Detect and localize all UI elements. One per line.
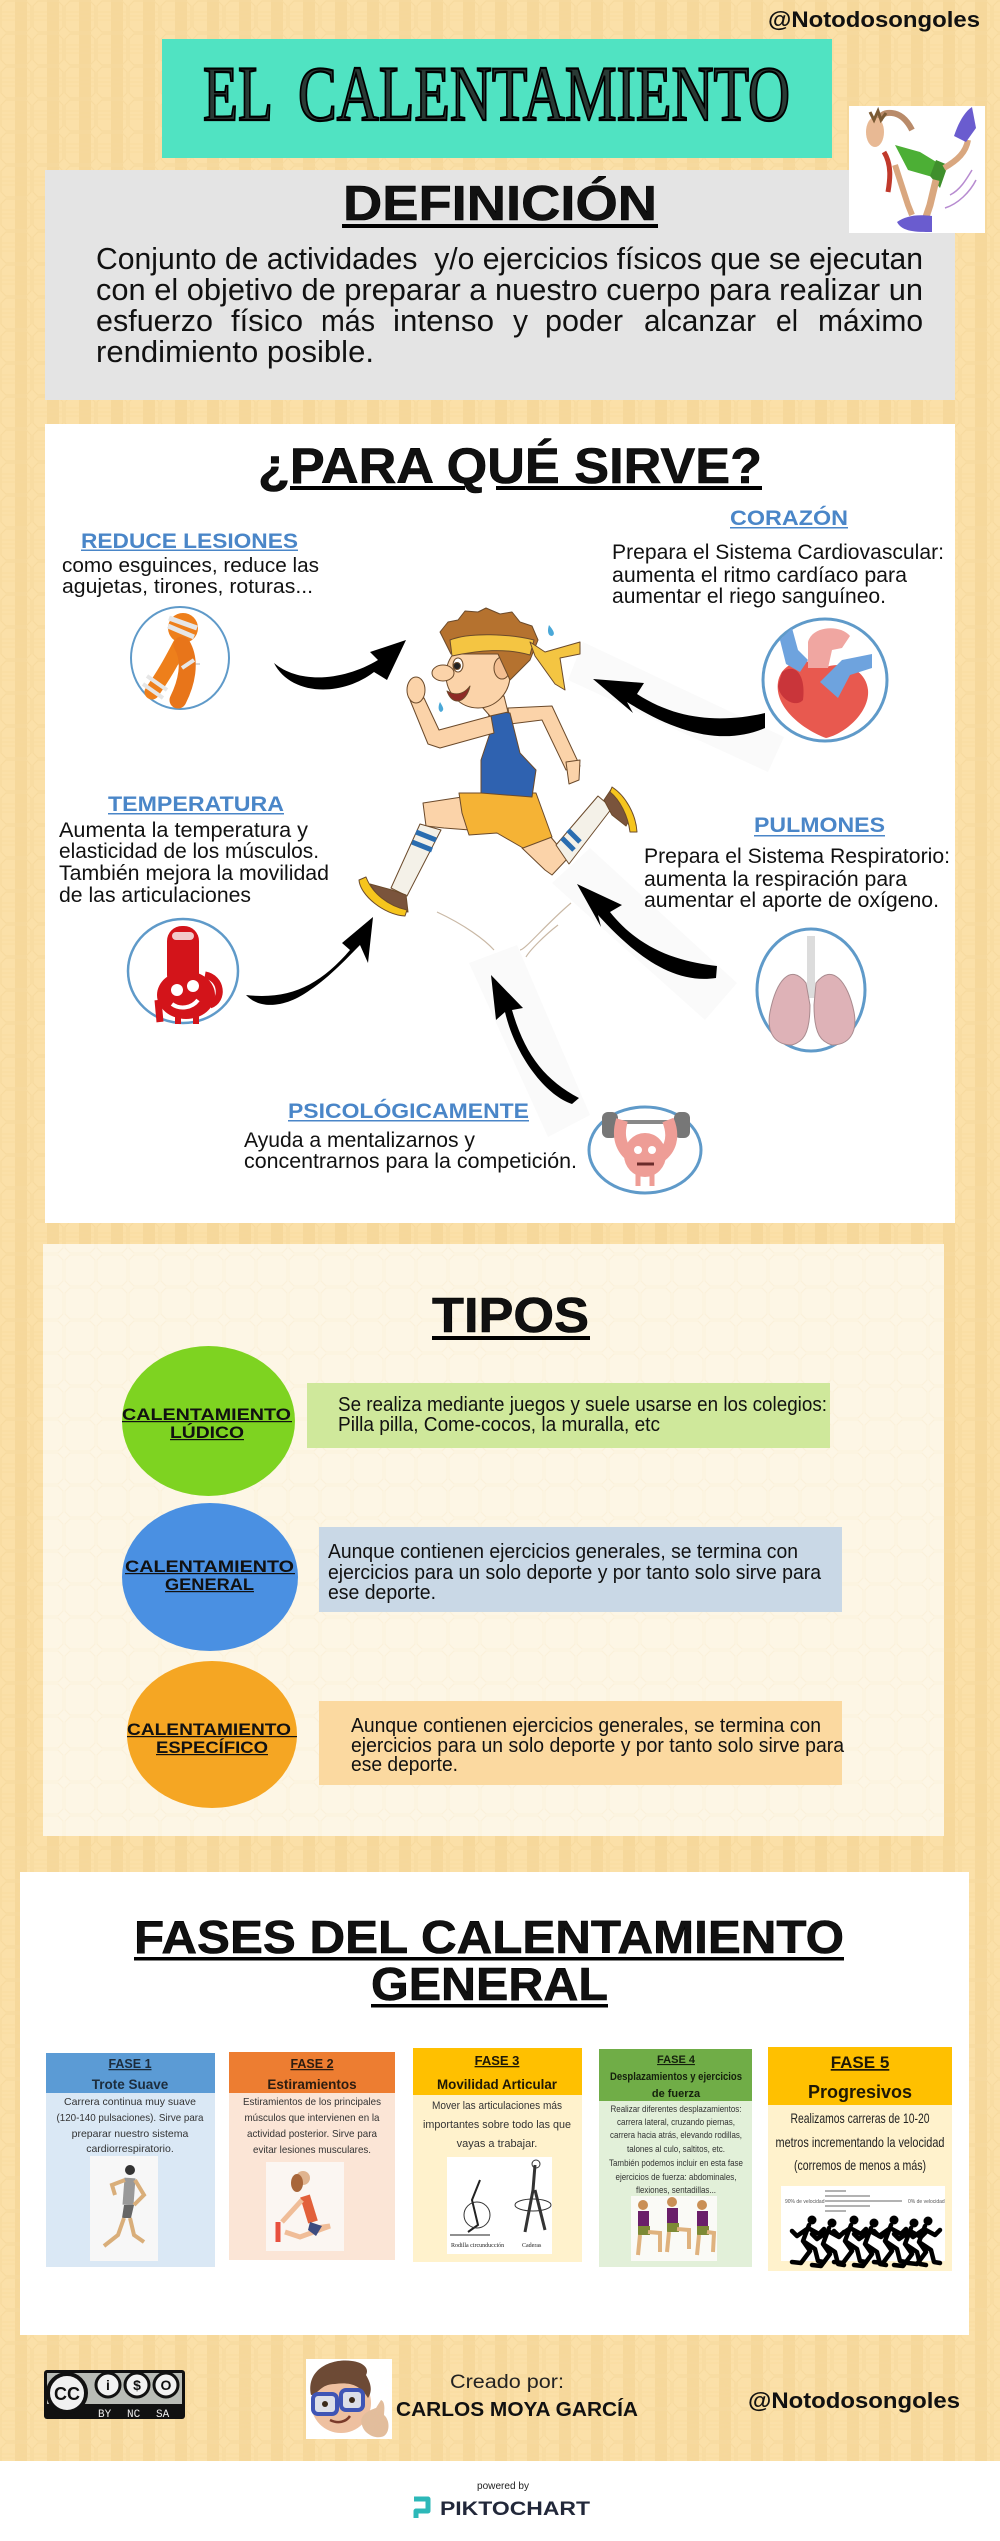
tipo: específico: Aunque contienen ejercicios generales, se termina con (351, 1715, 821, 1737)
block: pulmones: PULMONES (754, 814, 885, 837)
front leg (423, 797, 470, 830)
panel: tipos (43, 1244, 944, 1836)
block: corazón: Prepara el Sistema Cardiovascular: (612, 541, 944, 564)
sweat drops (439, 625, 554, 712)
block: psicológicamente: PSICOLÓGICAMENTE (288, 1099, 529, 1123)
text: definición (96, 241, 923, 369)
fase 1: cardiorrespiratorio. (86, 2143, 174, 2155)
block: temperatura: TEMPERATURA (108, 793, 284, 816)
block: psicológicamente: concentrarnos para la competición. (244, 1150, 577, 1173)
fase 4 (599, 2049, 752, 2267)
text: definición: el (776, 303, 798, 338)
icon: injured orange figure (131, 607, 229, 709)
piktochart branding: PIKTOCHART (440, 2499, 590, 2520)
block: pulmones: Prepara el Sistema Respiratorio: (644, 845, 950, 868)
fase 3: Rodilla circunducción (451, 2243, 504, 2249)
icon: thermometer (128, 919, 238, 1024)
fase 2: actividad posterior. Sirve para (247, 2128, 377, 2140)
text: definición: más (321, 303, 375, 338)
credit: Creado por: (450, 2372, 564, 2393)
heading: tipos: TIPOS (432, 1289, 589, 1343)
block: pulmones: aumenta la respiración para (644, 868, 907, 891)
icon: lungs (757, 929, 865, 1051)
icon: heart (763, 619, 887, 741)
tipo: general: GENERAL (165, 1575, 254, 1594)
block: temperatura: Aumenta la temperatura y (59, 819, 309, 842)
arrow: psicológicamente to runner (491, 975, 579, 1104)
heading: fases: GENERAL (371, 1958, 608, 2010)
motion lines (437, 903, 571, 957)
handle: bottom: @Notodosongoles (748, 2388, 960, 2413)
block: psicológicamente: Ayuda a mentalizarnos y (244, 1129, 475, 1152)
text: definición: y (513, 303, 528, 338)
arrow: corazón to runner (593, 679, 765, 736)
tipo: específico (127, 1661, 845, 1808)
panel: definición (45, 170, 955, 400)
block: temperatura: de las articulaciones (59, 884, 251, 907)
block: pulmones (644, 814, 950, 912)
footer band (0, 2461, 1000, 2541)
fase 1: (120-140 pulsaciones). Sirve para (56, 2112, 204, 2124)
title (162, 39, 832, 158)
tipo: lúdico (122, 1346, 830, 1496)
fase 4: También podemos incluir en esta fase (609, 2158, 743, 2168)
arrow: lesiones to runner (274, 640, 406, 689)
avatar (306, 2359, 392, 2439)
fase 3: FASE 3 (475, 2053, 519, 2068)
cc license badge: i (106, 2377, 110, 2393)
shorts (459, 793, 552, 848)
fase 1: preparar nuestro sistema (72, 2128, 189, 2140)
block: psicológicamente (244, 1099, 577, 1173)
panel: para qué sirve (45, 424, 955, 1223)
tipo: específico: ejercicios para un solo deporte y por tanto solo sirve para (351, 1735, 845, 1757)
block: temperatura: También mejora la movilidad (59, 862, 329, 885)
fase 5: 90% de velocidad (785, 2199, 825, 2205)
heading: definición: DEFINICIÓN (343, 176, 657, 231)
credit (396, 2372, 638, 2421)
fase 2: Estiramientos (267, 2077, 357, 2092)
fase 2: músculos que intervienen en la (244, 2112, 380, 2124)
block: reduce lesiones: agujetas, tirones, roturas... (62, 576, 313, 598)
text: definición: máximo (818, 303, 923, 338)
block: corazón (612, 506, 944, 608)
tipo: lúdico: LÚDICO (170, 1423, 244, 1442)
fase 4: carrera hacia atrás, elevando rodillas, (610, 2130, 742, 2140)
block: reduce lesiones: como esguinces, reduce las (62, 555, 319, 577)
fase 3: vayas a trabajar. (457, 2138, 537, 2150)
text: definición: intenso (393, 303, 494, 338)
block: corazón: aumentar el riego sanguíneo. (612, 585, 886, 608)
cc license badge: $ (133, 2377, 141, 2393)
fase 3: importantes sobre todo las que (423, 2119, 571, 2131)
tipo: específico: ese deporte. (351, 1754, 458, 1776)
block: temperatura (59, 793, 329, 907)
fase 1: Carrera continua muy suave (64, 2096, 196, 2108)
neck (476, 696, 508, 716)
tipo: general: Aunque contienen ejercicios generales, se termina con (328, 1541, 798, 1563)
back leg (522, 836, 568, 875)
cc license badge: SA (156, 2409, 170, 2421)
fase 3: Mover las articulaciones más (432, 2100, 562, 2112)
icon: brain lifting weights (589, 1107, 701, 1193)
fase 5 (768, 2047, 952, 2271)
cc license badge: BY (98, 2409, 112, 2421)
text: definición: rendimiento posible. (96, 334, 374, 369)
tipo: general (122, 1503, 842, 1651)
heading: para qué sirve: ¿PARA QUÉ SIRVE? (258, 438, 762, 494)
text: definición: físico (231, 303, 303, 338)
head (446, 642, 510, 708)
fase 5: Realizamos carreras de 10-20 (790, 2110, 930, 2126)
tipo: lúdico: CALENTAMIENTO (122, 1405, 291, 1424)
cc license badge: NC (127, 2409, 141, 2421)
ghost shadows behind arrows (568, 642, 784, 772)
block: reduce lesiones (62, 530, 319, 598)
back arm (508, 706, 580, 770)
fase 1: Trote Suave (92, 2077, 169, 2092)
arrow: pulmones to runner (577, 884, 717, 979)
fase 1 (46, 2053, 215, 2267)
fase 4: carrera lateral, cruzando piernas, (617, 2117, 735, 2127)
tipo: específico: ESPECÍFICO (156, 1738, 268, 1757)
title: EL (203, 50, 273, 137)
text: definición: esfuerzo (96, 303, 213, 338)
fase 5: metros incrementando la velocidad (776, 2134, 944, 2150)
fase 5: FASE 5 (831, 2053, 889, 2072)
fase 3 (413, 2048, 582, 2262)
runner illustration (359, 608, 637, 916)
fase 5: Progresivos (808, 2082, 912, 2102)
handle: top: @Notodosongoles (768, 7, 980, 32)
tipo: lúdico: Se realiza mediante juegos y suele usarse en los colegios: (338, 1394, 827, 1416)
fase 4: Desplazamientos y ejercicios (610, 2071, 742, 2083)
arrow: temperatura to runner (246, 917, 373, 1005)
tipo: específico: CALENTAMIENTO (127, 1720, 291, 1739)
cc license badge: CC (54, 2384, 80, 2404)
cc license badge (44, 2370, 185, 2421)
block: temperatura: elasticidad de los músculos. (59, 840, 319, 863)
fase 3: Caderas (522, 2243, 542, 2249)
block: corazón: aumenta el ritmo cardíaco para (612, 564, 907, 587)
icon: tired runner photo (849, 106, 985, 233)
panel: fases (20, 1872, 969, 2335)
tipo: general: CALENTAMIENTO (125, 1557, 294, 1576)
fase 2 (229, 2052, 395, 2260)
fase 5: 0% de velocidad (908, 2199, 945, 2205)
text: definición: alcanzar (644, 303, 756, 338)
tipo: lúdico: Pilla pilla, Come-cocos, la muralla, etc (338, 1414, 660, 1436)
fase 4: FASE 4 (657, 2054, 696, 2066)
fase 1: FASE 1 (108, 2057, 152, 2071)
block: reduce lesiones: REDUCE LESIONES (81, 530, 298, 553)
fase 4: ejercicios de fuerza: abdominales, (616, 2172, 736, 2182)
text: definición: con el objetivo de preparar a nuestro cuerpo para realizar un (96, 272, 923, 307)
credit: CARLOS MOYA GARCÍA (396, 2398, 638, 2421)
piktochart branding: powered by (477, 2481, 529, 2492)
fase 3: Movilidad Articular (437, 2076, 558, 2092)
fase 4: talones al culo, saltitos, etc. (627, 2144, 725, 2154)
front arm (410, 698, 494, 748)
tipo: general: ese deporte. (328, 1582, 436, 1604)
text: definición: Conjunto de actividades y/o ejercicios físicos que se ejecutan (96, 241, 923, 276)
heading: fases: FASES DEL CALENTAMIENTO (134, 1911, 844, 1963)
fase 4: de fuerza (652, 2088, 701, 2100)
fase 2: FASE 2 (290, 2057, 334, 2071)
fase 5: (corremos de menos a más) (794, 2157, 926, 2173)
fase 4: Realizar diferentes desplazamientos: (610, 2104, 742, 2114)
fase 2: Estiramientos de los principales (243, 2096, 381, 2108)
text: definición: poder (545, 303, 623, 338)
hair (440, 608, 538, 680)
fase 4: flexiones, sentadillas... (636, 2185, 716, 2195)
cc license badge: O (161, 2377, 172, 2393)
headband (450, 635, 534, 656)
block: pulmones: aumentar el aporte de oxígeno. (644, 889, 939, 912)
block: corazón: CORAZÓN (730, 506, 848, 530)
title: CALENTAMIENTO (298, 50, 790, 137)
piktochart branding (414, 2481, 590, 2520)
fase 2: evitar lesiones musculares. (253, 2144, 371, 2156)
tipo: general: ejercicios para un solo deporte y por tanto solo sirve para (328, 1562, 822, 1584)
heading: fases (134, 1911, 844, 2010)
tank top (481, 710, 536, 797)
